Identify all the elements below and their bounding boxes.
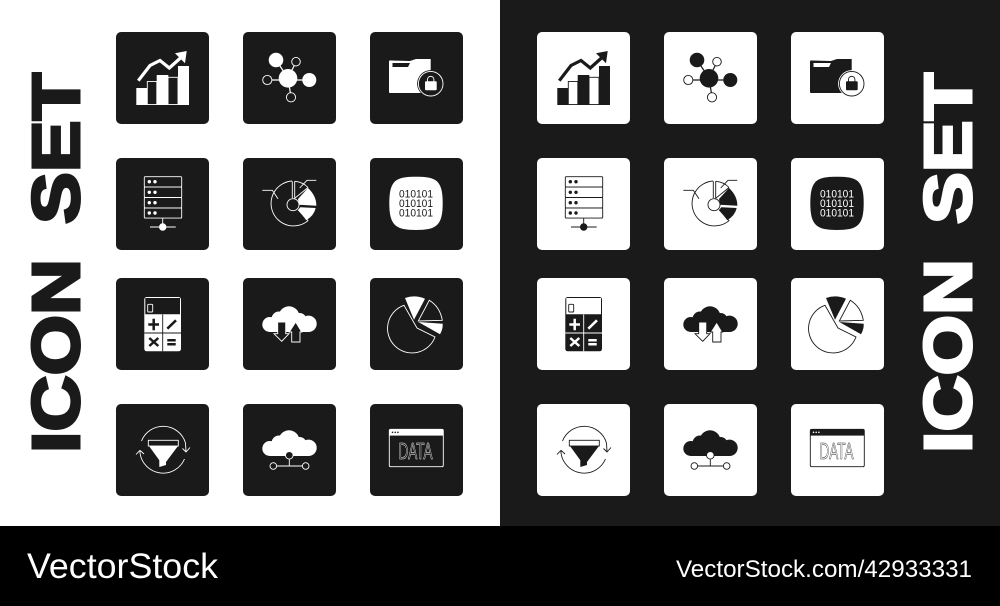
panel: left icon grid — [116, 32, 463, 496]
tile: locked folder — [370, 32, 463, 124]
background: dark right half — [500, 0, 1000, 526]
tile: network nodes — [243, 32, 336, 124]
heading: left ICON SET: ICON — [19, 259, 94, 453]
footer band — [0, 526, 1000, 606]
tile: pie chart — [791, 278, 884, 370]
heading: right ICON SET: SET — [911, 73, 986, 224]
heading: right ICON SET: ICON — [911, 259, 986, 453]
tile: binary code: 010101 — [820, 208, 854, 220]
heading: left ICON SET — [19, 73, 94, 453]
tile: calculator — [537, 278, 630, 370]
tile: data window: DATA — [398, 438, 433, 464]
tile: donut chart — [664, 158, 757, 250]
tile: donut chart — [243, 158, 336, 250]
panel: right icon grid — [537, 32, 884, 496]
tile: cloud network — [664, 404, 757, 496]
tile: growth chart — [537, 32, 630, 124]
tile: cloud network — [243, 404, 336, 496]
tile: binary code: 010101 — [820, 198, 854, 210]
heading: left ICON SET: SET — [19, 73, 94, 224]
tile: pie chart — [370, 278, 463, 370]
tile: data window: DATA — [820, 438, 854, 464]
tile: funnel filter — [116, 404, 209, 496]
tile: locked folder — [791, 32, 884, 124]
tile: binary code — [370, 158, 463, 250]
tile: cloud transfer — [664, 278, 757, 370]
background: white left half — [0, 0, 500, 526]
tile: data window — [370, 404, 463, 496]
tile: binary code: 010101 — [820, 188, 854, 200]
tile: binary code: 010101 — [399, 188, 433, 200]
tile: binary code: 010101 — [399, 208, 433, 220]
tile: server rack — [537, 158, 630, 250]
tile: funnel filter — [537, 404, 630, 496]
tile: binary code — [791, 158, 884, 250]
footer image id: VectorStock.com/42933331 — [676, 556, 972, 583]
heading: right ICON SET — [911, 73, 986, 453]
tile: network nodes — [664, 32, 757, 124]
tile: binary code: 010101 — [399, 198, 433, 210]
tile: cloud transfer — [243, 278, 336, 370]
tile: data window — [791, 404, 884, 496]
tile: growth chart — [116, 32, 209, 124]
footer brand: VectorStock — [27, 547, 219, 586]
tile: server rack — [116, 158, 209, 250]
tile: calculator — [116, 278, 209, 370]
